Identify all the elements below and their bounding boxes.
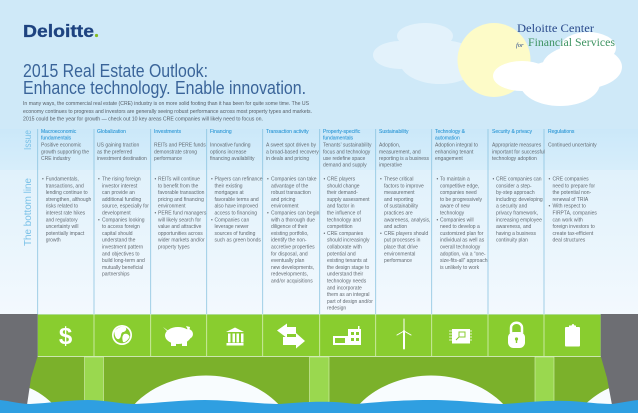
column 6: property-specific fundamentals: potential and — [327, 251, 356, 257]
column 7: sustainability: and reporting — [384, 197, 414, 203]
column 5: transaction activity: in deals and pricing — [266, 156, 309, 162]
column 4: financing: Innovative funding — [210, 143, 251, 149]
column 7: sustainability: measurement — [384, 190, 415, 196]
column 4: financing: • — [211, 217, 213, 223]
column 7: sustainability: These critical — [384, 176, 413, 182]
column 10: regulations: Continued uncertainty — [548, 143, 597, 149]
column 5: transaction activity: environment — [271, 204, 299, 210]
column 2: globalization: and objectives to — [102, 251, 140, 257]
column 9: security and privacy: consider a step- — [496, 183, 532, 189]
column 6: property-specific fundamentals: understand their — [327, 272, 363, 278]
column 6: property-specific fundamentals: competition — [327, 224, 353, 230]
column 7: sustainability: • — [380, 176, 382, 182]
column 4: financing: their existing — [214, 183, 243, 189]
column 2: globalization: • — [98, 176, 100, 182]
icon: padlock — [508, 323, 525, 348]
column 2: globalization: as the preferred — [97, 149, 133, 155]
column 9: security and privacy: • — [492, 176, 494, 182]
column 2: globalization: investment pattern — [102, 244, 143, 250]
column 6: property-specific fundamentals: part of design and/or — [327, 299, 373, 305]
title: 2015 Real Estate Outlook: — [23, 60, 208, 81]
column 1: macroeconomic fundamentals: interest rate hikes — [46, 210, 86, 216]
column 2: globalization: capital should — [102, 231, 133, 237]
column 7: sustainability: reporting is a business — [379, 156, 430, 162]
column 2: globalization: investor interest — [102, 183, 138, 189]
column 6: property-specific fundamentals: CRE players — [327, 176, 356, 182]
column 3: investments: REITs and PERE funds — [154, 143, 206, 149]
column 9: security and privacy: awareness, and — [496, 224, 532, 230]
intro text: In many ways, the commercial real estate (CRE) industry is on more solid footing than it has been for quite some time. The US — [23, 101, 310, 107]
icon: globe — [112, 325, 132, 345]
column 2: globalization: • — [98, 217, 100, 223]
column 8: technology and automation: technology — [440, 210, 465, 216]
column 1: macroeconomic fundamentals: CRE industry — [41, 156, 71, 162]
band: the bottom line — [0, 170, 638, 314]
column 7: sustainability: imperative — [379, 162, 402, 168]
column 5: transaction activity: identify the non- — [271, 238, 307, 244]
intro text: 2015 could be the year for growth — check out 10 key areas CRE companies will likely need to focus on. — [23, 116, 263, 122]
column 7: sustainability: environmental — [384, 251, 415, 257]
column 8: technology and automation: Technology & — [435, 129, 466, 135]
logo: Deloitte Center for Financial Services: for — [516, 42, 524, 49]
column 2: globalization: partnerships — [102, 272, 130, 278]
column 1: macroeconomic fundamentals: transactions, and — [46, 183, 84, 189]
column 9: security and privacy: having a business — [496, 231, 537, 237]
column 10: regulations: Regulations — [548, 129, 575, 135]
column 2: globalization: US gaining traction — [97, 143, 139, 149]
column 4: financing: • — [211, 176, 213, 182]
column 4: financing: financing availability — [210, 156, 255, 162]
column 6: property-specific fundamentals: the design stage to — [327, 265, 369, 271]
column 8: technology and automation: individual as well as — [440, 238, 485, 244]
column 7: sustainability: Sustainability — [379, 129, 409, 135]
column 5: transaction activity: Companies can take — [271, 176, 317, 182]
deck lines — [38, 314, 601, 356]
column 3: investments: REITs will continue — [158, 176, 200, 182]
column 5: transaction activity: and/or acquisitions — [271, 278, 313, 284]
intro text: economy continues to progress and investors are generally seeing robust performance across most property types and markets. — [23, 109, 312, 115]
intro text — [23, 101, 312, 122]
column 4: financing: Companies can — [214, 217, 249, 223]
icon: wind turbine — [397, 319, 411, 348]
column 8: technology and automation: need to develop a — [440, 224, 480, 230]
column 1: macroeconomic fundamentals: growth supporting the — [41, 149, 89, 155]
column 3: investments: PERE fund managers — [158, 210, 207, 216]
column 4: financing: Financing — [210, 129, 232, 135]
column 10: regulations: deal structures — [552, 238, 586, 244]
column 7: sustainability: performance — [384, 258, 412, 264]
column 2: globalization: additional funding — [102, 197, 141, 203]
column 6: property-specific fundamentals: demand and supply — [323, 162, 367, 168]
column 1: macroeconomic fundamentals: • — [42, 176, 44, 182]
column 8: technology and automation: companies need — [440, 190, 477, 196]
column 3: investments: favorable transaction — [158, 190, 205, 196]
column 8: technology and automation: Companies will — [440, 217, 474, 223]
column 8: technology and automation: automation — [435, 136, 460, 142]
column 6: property-specific fundamentals: should increasingly — [327, 238, 370, 244]
column 3: investments: opportunities across — [158, 231, 203, 237]
column 2: globalization: understand the — [102, 238, 136, 244]
column 4: financing: options increase — [210, 149, 247, 155]
column 10: regulations: • — [548, 204, 550, 210]
column 8: technology and automation: To maintain a — [440, 176, 470, 182]
column 6: property-specific fundamentals: the influence of — [327, 210, 362, 216]
bridge deck: icon bar — [38, 314, 601, 356]
column 6: property-specific fundamentals: use redefine space — [323, 156, 365, 162]
logo: Deloitte Center for Financial Services: Financial Services — [528, 35, 615, 49]
column 1: macroeconomic fundamentals — [41, 129, 92, 244]
column 2: globalization: The rising foreign — [102, 176, 141, 182]
column dividers — [38, 129, 544, 314]
column 4: financing — [210, 129, 263, 244]
column 7: sustainability: Adoption, — [379, 143, 400, 149]
column 3: investments: property types — [158, 244, 190, 250]
column 6: property-specific fundamentals: supply assessment — [327, 197, 370, 203]
column 8: technology and automation: aware of new — [440, 204, 470, 210]
column 5: transaction activity: eventually plan — [271, 258, 305, 264]
column 1: macroeconomic fundamentals: Fundamentals, — [46, 176, 79, 182]
column 10: regulations: With respect to — [552, 204, 586, 210]
column 8: technology and automation: competitive edge, — [440, 183, 479, 189]
column 10: regulations — [548, 129, 597, 244]
water — [0, 400, 638, 413]
column 9: security and privacy: privacy framework, — [496, 210, 538, 216]
column 1: macroeconomic fundamentals: growth — [46, 238, 61, 244]
column 9: security and privacy: including: developing — [496, 197, 543, 203]
column 6: property-specific fundamentals: should change — [327, 183, 360, 189]
column 10: regulations: can work with — [552, 217, 583, 223]
column 4: financing: leverage newer — [214, 224, 249, 230]
column 6: property-specific fundamentals: technology needs — [327, 278, 367, 284]
clouds and sun — [373, 23, 622, 106]
column 5: transaction activity: a broad-based recovery — [266, 149, 319, 155]
column 3: investments: Investments — [154, 129, 181, 135]
column 6: property-specific fundamentals — [323, 129, 373, 312]
column 9: security and privacy: important for successful — [492, 149, 545, 155]
column 6: property-specific fundamentals: CRE companies — [327, 231, 364, 237]
column 2: globalization: can provide an — [102, 190, 135, 196]
column 8: technology and automation: • — [436, 176, 438, 182]
column 7: sustainability: CRE players should — [384, 231, 428, 237]
column 6: property-specific fundamentals: • — [324, 231, 326, 237]
column 7: sustainability: practices are — [384, 210, 413, 216]
column 3: investments: performance — [154, 156, 182, 162]
column 8: technology and automation — [435, 129, 488, 271]
column 2: globalization — [97, 129, 149, 278]
column 3: investments: • — [154, 210, 156, 216]
column 2: globalization: mutually beneficial — [102, 265, 143, 271]
column 7: sustainability: awareness, analysis, — [384, 217, 430, 223]
column 5: transaction activity: with a thorough due — [271, 217, 315, 223]
column 10: regulations: FIRPTA, companies — [552, 210, 597, 216]
column 3: investments — [154, 129, 207, 250]
column 6: property-specific fundamentals: fundamentals — [323, 136, 354, 142]
column 5: transaction activity: Companies can begin — [271, 210, 320, 216]
column 6: property-specific fundamentals: and factor in — [327, 204, 355, 210]
column 8: technology and automation: engagement — [435, 156, 463, 162]
column 7: sustainability: and action — [384, 224, 407, 230]
column 5: transaction activity: A sweet spot driven by — [266, 143, 317, 149]
column 6: property-specific fundamentals: collaborate with — [327, 244, 362, 250]
column 3: investments: value and attractive — [158, 224, 202, 230]
column 5: transaction activity: accretive properties — [271, 244, 315, 250]
column 7: sustainability: place that drive — [384, 244, 418, 250]
title: Enhance technology. Enable innovation. — [23, 77, 306, 98]
icon: bank building — [226, 328, 244, 346]
column 10: regulations: the potential non- — [552, 190, 591, 196]
column 1: macroeconomic fundamentals: strengthen, although — [46, 197, 92, 203]
column 4: financing: such as green bonds — [214, 238, 261, 244]
column 5: transaction activity: • — [267, 176, 269, 182]
column 5: transaction activity: advantage of the — [271, 183, 308, 189]
column 2: globalization: Globalization — [97, 129, 126, 135]
column 8: technology and automation: Adoption integral to — [435, 143, 478, 149]
column 6: property-specific fundamentals: existing tenants at — [327, 258, 368, 264]
column 5: transaction activity: Transaction activity — [266, 129, 309, 135]
column 6: property-specific fundamentals: focus and technology — [323, 149, 371, 155]
column 1: macroeconomic fundamentals: Positive economic — [41, 143, 82, 149]
column 6: property-specific fundamentals: technology and — [327, 217, 361, 223]
column 7: sustainability: put processes in — [384, 238, 421, 244]
column 9: security and privacy: CRE companies can — [496, 176, 542, 182]
column 2: globalization: Companies looking — [102, 217, 145, 223]
column 10: regulations: create tax-efficient — [552, 231, 594, 237]
column 3: investments: environment — [158, 204, 186, 210]
column 8: technology and automation: to be progressively — [440, 197, 482, 203]
column 10: regulations: CRE companies — [552, 176, 589, 182]
column 5: transaction activity — [266, 129, 320, 284]
column 8: technology and automation: overall technology — [440, 244, 481, 250]
column 1: macroeconomic fundamentals: uncertainty will — [46, 224, 78, 230]
title — [23, 60, 306, 98]
column 5: transaction activity: for disposal, and — [271, 251, 308, 257]
icon: piggy bank — [163, 326, 193, 346]
column 4: financing: sources of funding — [214, 231, 256, 237]
column 10: regulations: • — [548, 176, 550, 182]
column 1: macroeconomic fundamentals: fundamentals — [41, 136, 72, 142]
column 8: technology and automation: size-fits-all” approach — [440, 258, 488, 264]
column 10: regulations: foreign investors to — [552, 224, 595, 230]
band: issue — [0, 129, 638, 170]
left pillar — [0, 314, 38, 405]
column 1: macroeconomic fundamentals: Macroeconomic — [41, 129, 77, 135]
bridge arches — [25, 356, 614, 406]
column 3: investments: demonstrate strong — [154, 149, 197, 155]
column 8: technology and automation: • — [436, 217, 438, 223]
column 2: globalization: build long-term and — [102, 258, 145, 264]
column 1: macroeconomic fundamentals: and regulatory — [46, 217, 78, 223]
column 2: globalization: development — [102, 210, 131, 216]
column 4: financing: also have improved — [214, 204, 258, 210]
column 3: investments: • — [154, 176, 156, 182]
column 9: security and privacy: by-step approach — [496, 190, 535, 196]
label: Issue: Issue — [22, 130, 34, 150]
column 5: transaction activity: • — [267, 210, 269, 216]
column 3: investments: wider markets and/or — [158, 238, 205, 244]
column 6: property-specific fundamentals: and incorporate — [327, 285, 362, 291]
column 7: sustainability — [379, 129, 430, 264]
logo: Deloitte Center for Financial Services — [516, 23, 615, 49]
column 2: globalization: source, especially for — [102, 204, 149, 210]
column 9: security and privacy: continuity plan — [496, 238, 528, 244]
column 6: property-specific fundamentals: them as an integral — [327, 292, 370, 298]
column 8: technology and automation: adoption, via a “one- — [440, 251, 486, 257]
column 1: macroeconomic fundamentals: risks related to — [46, 204, 78, 210]
column 5: transaction activity: existing portfolio, — [271, 231, 309, 237]
column 6: property-specific fundamentals: Tenants’ sustainability — [323, 143, 372, 149]
column 6: property-specific fundamentals: their demand- — [327, 190, 358, 196]
column 5: transaction activity: redevelopments, — [271, 272, 308, 278]
logo: Deloitte: Deloitte — [23, 21, 94, 41]
column 10: regulations: renewal of TRIA — [552, 197, 589, 203]
icon: dollar: $ — [59, 323, 73, 350]
column 9: security and privacy: technology adoption — [492, 156, 537, 162]
column 9: security and privacy: Appropriate measures — [492, 143, 542, 149]
icon: circuit chip — [449, 329, 472, 344]
column 3: investments: will likely search for — [158, 217, 201, 223]
column 8: technology and automation: enhancing tenant — [435, 149, 474, 155]
label: The bottom line: The bottom line — [22, 178, 34, 246]
column 5: transaction activity: and pricing — [271, 197, 296, 203]
column 4: financing: favorable terms and — [214, 197, 259, 203]
right pillar — [601, 314, 638, 405]
column 9: security and privacy: Security & privacy — [492, 129, 533, 135]
logo: Deloitte Center for Financial Services: Deloitte Center — [517, 23, 594, 35]
column 9: security and privacy: a security and — [496, 204, 527, 210]
column 2: globalization: investment destination — [97, 156, 147, 162]
column 4: financing: Players can refinance — [214, 176, 263, 182]
column 8: technology and automation: is unlikely to work — [440, 265, 480, 271]
column 6: property-specific fundamentals: • — [324, 176, 326, 182]
column 7: sustainability: measurement, and — [379, 149, 421, 155]
column 7: sustainability: • — [380, 231, 382, 237]
column 1: macroeconomic fundamentals: potentially impact — [46, 231, 85, 237]
icon: exchange arrows — [277, 324, 305, 348]
icon: clipboard — [565, 324, 580, 346]
column 1: macroeconomic fundamentals: lending continue to — [46, 190, 88, 196]
column 3: investments: pricing and financing — [158, 197, 204, 203]
column 10: regulations: need to prepare for — [552, 183, 595, 189]
column 5: transaction activity: diligence of their — [271, 224, 308, 230]
column 7: sustainability: factors to improve — [384, 183, 424, 189]
column 3: investments: to benefit from the — [158, 183, 199, 189]
column 6: property-specific fundamentals: Property-specific — [323, 129, 361, 135]
column 2: globalization: to access foreign — [102, 224, 140, 230]
column 4: financing: mortgages at — [214, 190, 244, 196]
icon: office buildings — [333, 326, 361, 345]
column 9: security and privacy — [492, 129, 545, 244]
column 4: financing: access to financing — [214, 210, 257, 216]
column 5: transaction activity: robust transaction — [271, 190, 311, 196]
column 7: sustainability: of sustainability — [384, 204, 419, 210]
column 5: transaction activity: new developments, — [271, 265, 314, 271]
column 9: security and privacy: increasing employee — [496, 217, 542, 223]
column 8: technology and automation: customized plan for — [440, 231, 484, 237]
column 6: property-specific fundamentals: redesign — [327, 306, 346, 312]
